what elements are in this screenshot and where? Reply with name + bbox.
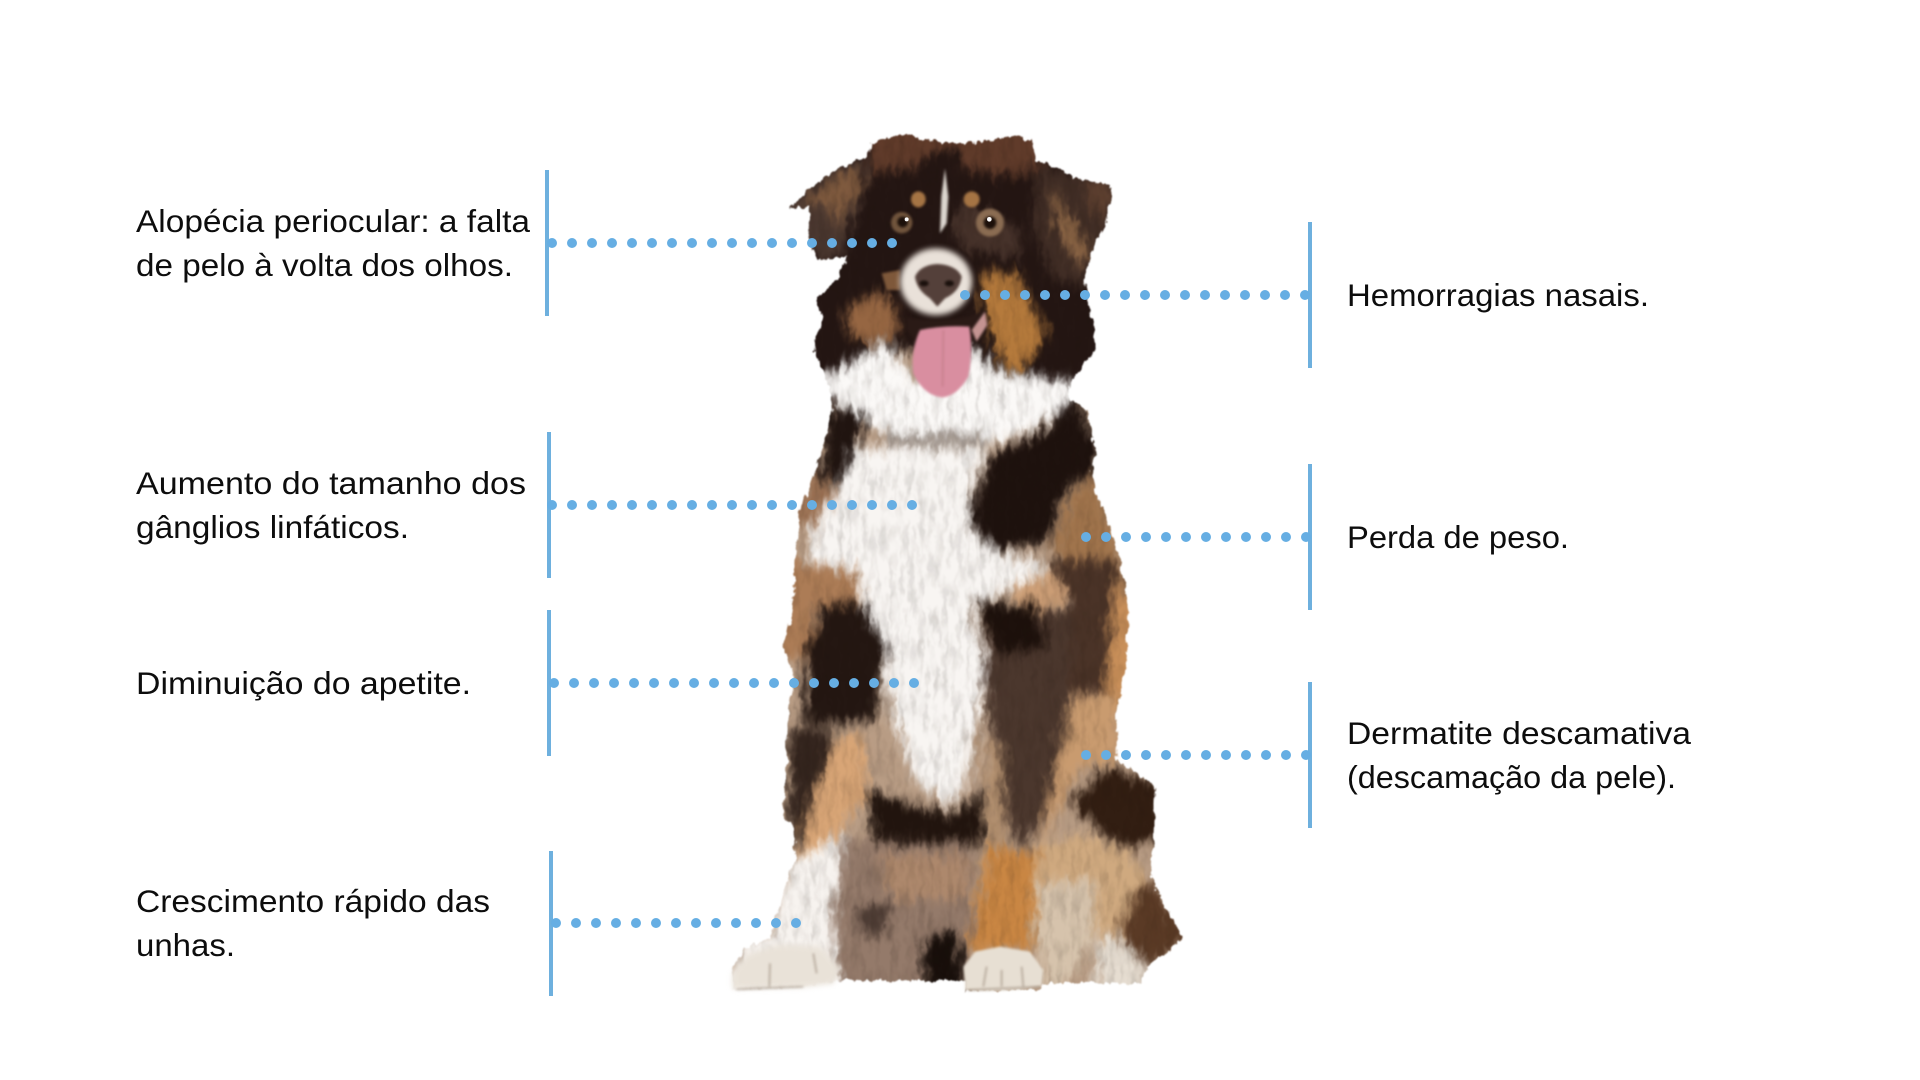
left shoulder tan [793, 470, 840, 530]
dog illustration [730, 133, 1184, 994]
right leg black core [977, 600, 1047, 657]
right cheek tan [980, 273, 1047, 373]
left leg white [720, 833, 847, 1003]
hip tan [1038, 692, 1118, 833]
left glint [905, 217, 909, 221]
dog face details [882, 168, 1004, 397]
right nostril [945, 280, 954, 286]
divider bar [1308, 222, 1312, 368]
muzzle white [900, 248, 972, 315]
right leg dark [980, 607, 1072, 852]
right shoulder dark [967, 397, 1103, 550]
callout: dermatite [1086, 682, 1692, 828]
left brow [911, 191, 926, 207]
divider bar [549, 851, 553, 996]
callout text: (descamação da pele). [1347, 759, 1676, 795]
right paw toes [968, 967, 1040, 990]
left paw [733, 945, 839, 988]
belly tan [877, 853, 970, 900]
dotted leader [554, 678, 914, 688]
lip [972, 312, 987, 342]
left leg tan stripe [797, 733, 867, 857]
base coat [732, 340, 1182, 993]
tail [1117, 877, 1193, 970]
belly dark [867, 787, 983, 843]
right brow [964, 191, 980, 207]
left pupil [897, 217, 908, 227]
right paw [963, 947, 1043, 991]
white ruff [817, 340, 1077, 443]
right chest tan [1007, 570, 1070, 613]
belly dark spot bottom [923, 930, 967, 997]
divider bar [1308, 464, 1312, 610]
dog body with fur edge [732, 133, 1184, 993]
hip dark patch [1070, 767, 1167, 850]
nose [915, 264, 962, 307]
fur streak texture [720, 123, 1200, 1003]
right shoulder tan [1053, 473, 1133, 610]
right ear [1031, 164, 1110, 290]
callout: alopecia periocular [136, 170, 892, 316]
muzzle tan top [882, 270, 900, 290]
left leg lower dark [787, 727, 833, 857]
dotted leader [1086, 750, 1306, 760]
mid face brown [953, 200, 1020, 257]
white blaze [940, 168, 948, 233]
left shoulder dark [817, 403, 870, 487]
callout text: Aumento do tamanho dos [136, 465, 526, 501]
divider bar [547, 432, 551, 578]
callout text: unhas. [136, 927, 235, 963]
left leg upper tan [777, 560, 863, 663]
tongue groove [940, 330, 946, 387]
dotted leader [556, 918, 796, 928]
callout text: Crescimento rápido das [136, 883, 490, 919]
right glint [987, 217, 992, 222]
tongue [913, 326, 971, 397]
mouth [907, 310, 987, 343]
left leg black [803, 603, 885, 727]
divider bar [545, 170, 549, 316]
callout: unhas [136, 851, 796, 996]
rear paw [1093, 937, 1147, 997]
belly fur [833, 840, 977, 997]
dotted leader [965, 290, 1306, 300]
right pupil [984, 216, 996, 229]
callout text: gânglios linfáticos. [136, 509, 409, 545]
dotted leader [552, 500, 912, 510]
right eye iris [976, 209, 1004, 237]
callout: linfonodos [136, 432, 912, 578]
left paw toes [737, 953, 817, 989]
right leg streak [985, 743, 1007, 847]
collar grey [887, 435, 987, 445]
mouth and tongue [907, 264, 987, 397]
callout text: Hemorragias nasais. [1347, 277, 1649, 313]
lower hip [1037, 833, 1147, 937]
white chest [807, 447, 1043, 807]
right leg tan [967, 840, 1037, 950]
right body dark upper [1050, 560, 1117, 693]
callout text: Alopécia periocular: a falta [136, 203, 531, 239]
belly dark spot left [857, 903, 890, 937]
dotted leader [1086, 532, 1306, 542]
dog fur colour masses [732, 133, 1184, 993]
eyes [891, 209, 1004, 237]
forehead brown [863, 120, 1043, 177]
divider bar [1308, 682, 1312, 828]
left cheek tan [843, 292, 897, 347]
left ear [790, 154, 874, 260]
pale rear fur [1035, 880, 1097, 990]
callout text: Perda de peso. [1347, 519, 1569, 555]
callout text: Dermatite descamativa [1347, 715, 1692, 751]
divider bar [547, 610, 551, 756]
head dark coat [795, 140, 1108, 413]
callout text: de pelo à volta dos olhos. [136, 247, 513, 283]
toe lines [737, 953, 1040, 990]
left nostril [919, 280, 929, 286]
callout text: Diminuição do apetite. [136, 665, 471, 701]
right flank tan strip [1105, 587, 1140, 717]
left eye iris [891, 212, 912, 233]
blaze and brows [882, 168, 980, 290]
dotted leader [552, 238, 892, 248]
